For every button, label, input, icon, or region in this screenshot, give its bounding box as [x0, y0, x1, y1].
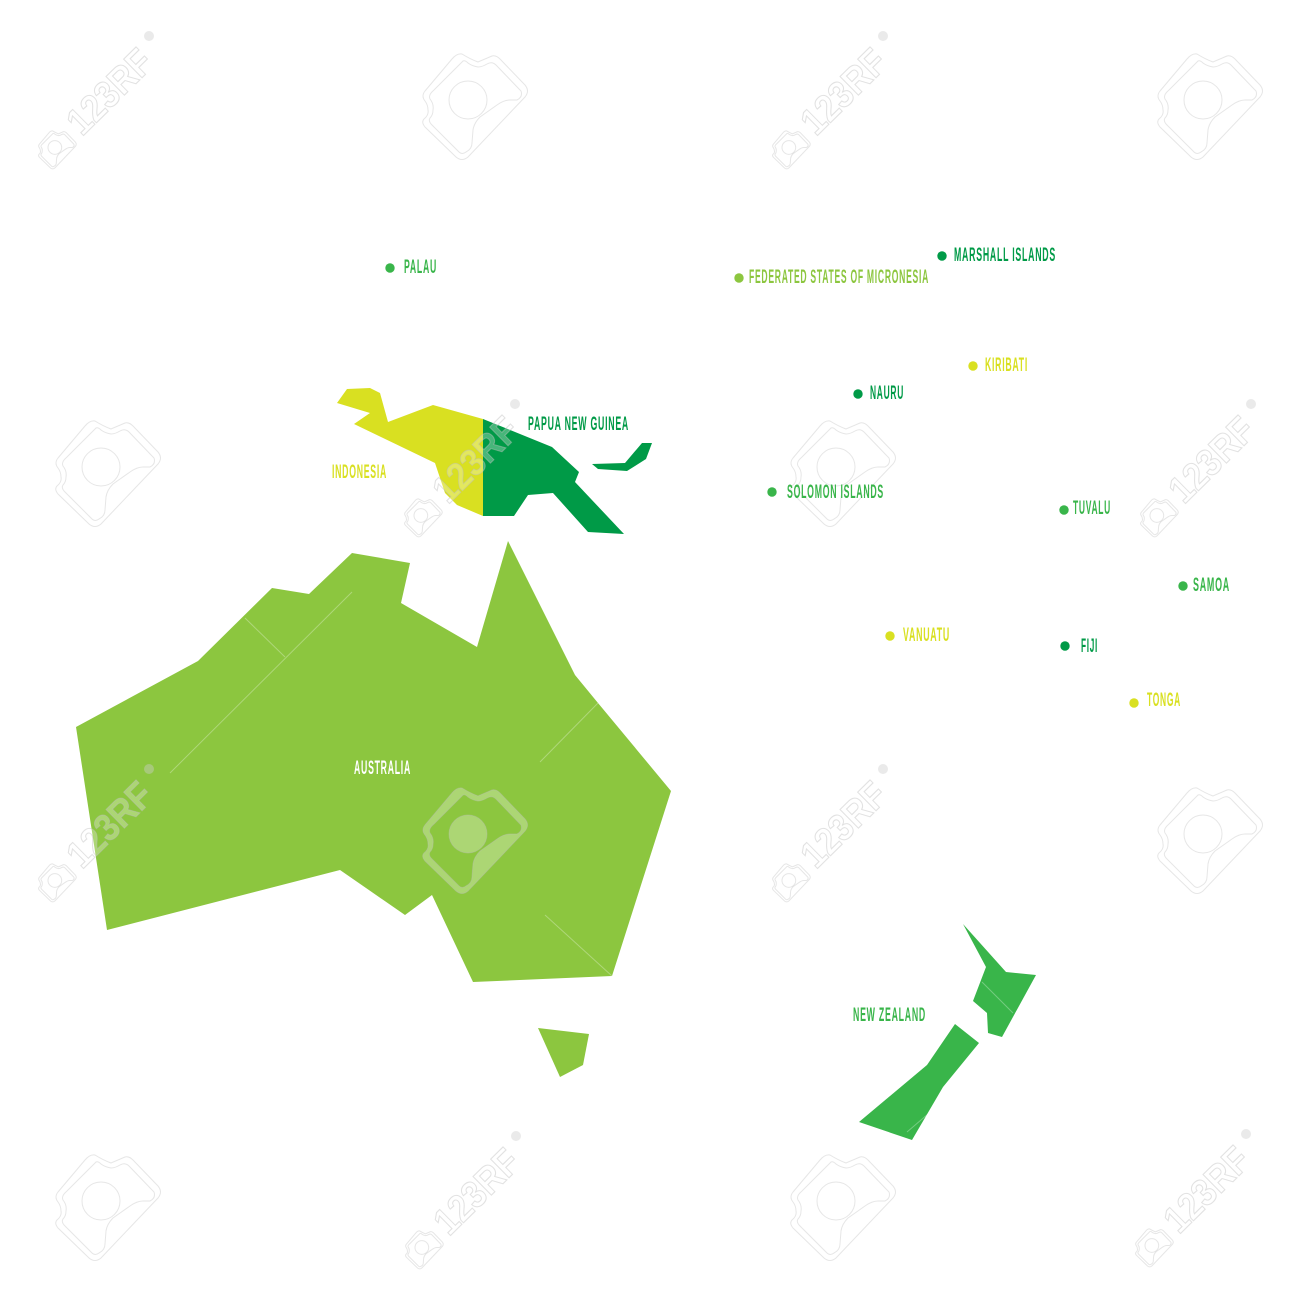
text: FEDERATED STATES OF MICRONESIA	[749, 267, 929, 288]
map: Tasmania	[538, 1028, 589, 1077]
label: Tonga	[1129, 690, 1181, 711]
text: TONGA	[1147, 690, 1181, 711]
label: Kiribati	[968, 355, 1028, 376]
map: Papua New Guinea	[483, 419, 652, 534]
map: New Britain	[592, 443, 652, 471]
label: Tuvalu	[1059, 498, 1111, 519]
text: AUSTRALIA	[354, 758, 411, 779]
label: Nauru	[853, 383, 904, 404]
text: PAPUA NEW GUINEA	[528, 414, 629, 435]
text: FIJI	[1081, 636, 1098, 657]
text: PALAU	[404, 257, 437, 278]
label: Fiji	[1060, 636, 1098, 657]
label: Solomon Islands	[767, 482, 884, 503]
label: Samoa	[1178, 575, 1230, 596]
text: NAURU	[870, 383, 904, 404]
map: New Zealand	[859, 924, 1036, 1140]
text: INDONESIA	[332, 462, 387, 483]
text: TUVALU	[1073, 498, 1111, 519]
text: SAMOA	[1193, 575, 1230, 596]
text: MARSHALL ISLANDS	[954, 245, 1056, 266]
label: Federated States of Micronesia	[734, 267, 929, 288]
label: Vanuatu	[885, 625, 950, 646]
text: VANUATU	[903, 625, 950, 646]
map: Australia	[76, 541, 671, 1077]
text: KIRIBATI	[985, 355, 1028, 376]
text: SOLOMON ISLANDS	[787, 482, 884, 503]
text: NEW ZEALAND	[853, 1005, 926, 1026]
label: Marshall Islands	[937, 245, 1056, 266]
label: Palau	[385, 257, 437, 278]
map: Indonesia (New Guinea west)	[337, 388, 483, 516]
